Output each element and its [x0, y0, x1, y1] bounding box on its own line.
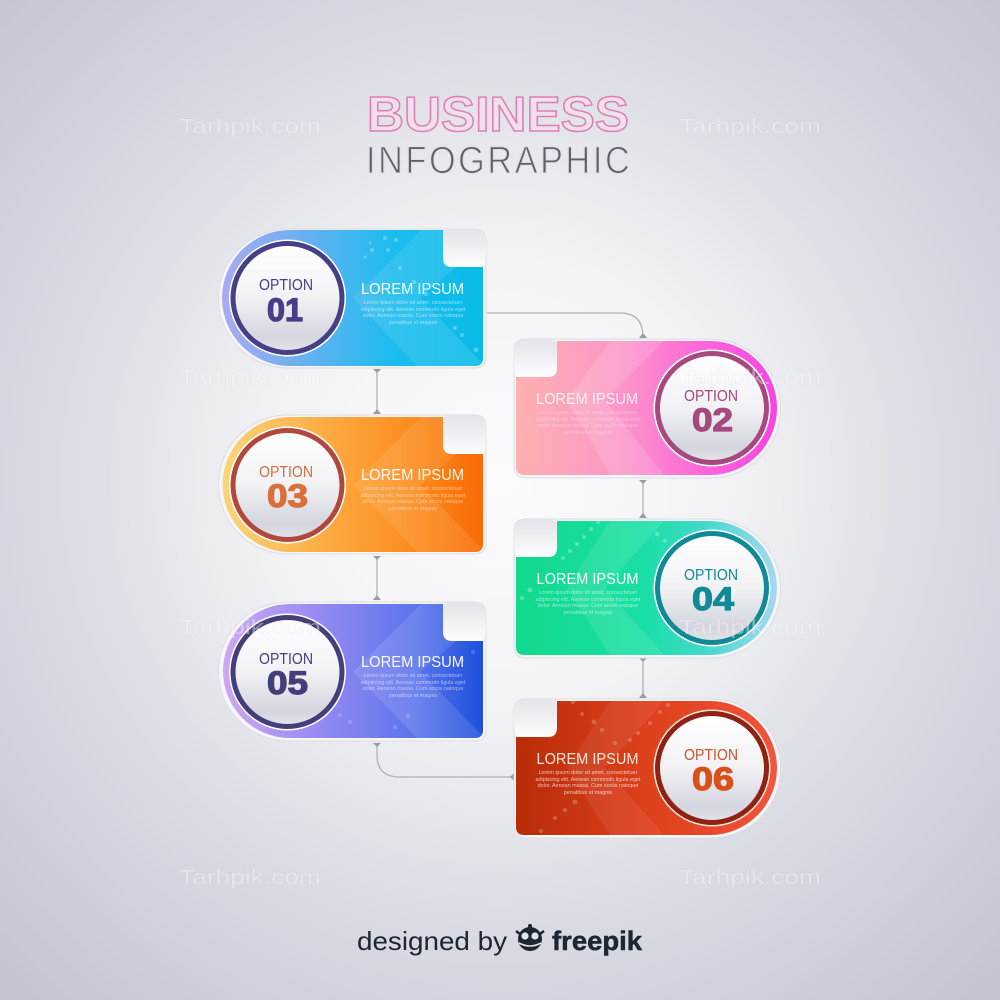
- text block: penatibus et magnis: [564, 430, 612, 436]
- badge: OPTION: [684, 388, 738, 405]
- panel: option 05: [219, 602, 500, 741]
- badge: OPTION: [259, 464, 313, 481]
- badge: OPTION: [259, 651, 313, 668]
- panel: option 03: [219, 415, 500, 554]
- title line: infographic: INFOGRAPHIC: [366, 138, 630, 181]
- badge: 06: [692, 761, 734, 797]
- footer credit: [357, 924, 643, 956]
- badge: OPTION: [259, 277, 313, 294]
- text block: dolor. Aenean massa. Cum sociis natoque: [363, 686, 463, 692]
- text block: [536, 391, 641, 436]
- watermarks: Tarhpik.com: [679, 116, 821, 138]
- text block: dolor. Aenean massa. Cum sociis natoque: [538, 423, 638, 429]
- watermarks: [179, 116, 821, 889]
- badge: [654, 350, 770, 466]
- badge: [654, 530, 770, 646]
- watermarks: Tarhpik.com: [179, 617, 321, 639]
- text block: adipiscing elit. Aenean commodo ligula eget: [361, 307, 466, 313]
- watermarks: Tarhpik.com: [179, 867, 321, 889]
- text block: Lorem ipsum dolor sit amet, consectetuer: [539, 410, 638, 416]
- text block: [536, 751, 641, 796]
- text block: LOREM IPSUM: [536, 571, 638, 588]
- text block: adipiscing elit. Aenean commodo ligula eget: [361, 680, 466, 686]
- panel: option 01: [219, 229, 500, 368]
- footer credit: freepik: [552, 926, 643, 956]
- text block: [536, 571, 641, 616]
- panel: option 02: [514, 339, 780, 478]
- badge: [229, 426, 346, 544]
- text block: adipiscing elit. Aenean commodo ligula eget: [536, 777, 641, 783]
- text block: adipiscing elit. Aenean commodo ligula eget: [536, 597, 641, 603]
- text block: Lorem ipsum dolor sit amet, consectetuer: [364, 673, 463, 679]
- text block: adipiscing elit. Aenean commodo ligula eget: [536, 417, 641, 423]
- text block: adipiscing elit. Aenean commodo ligula eget: [361, 493, 466, 499]
- text block: Lorem ipsum dolor sit amet, consectetuer: [539, 590, 638, 596]
- text block: penatibus et magnis: [389, 320, 437, 326]
- text block: Lorem ipsum dolor sit amet, consectetuer: [364, 486, 463, 492]
- text block: penatibus et magnis: [564, 610, 612, 616]
- badge: [654, 710, 770, 826]
- connectors: [373, 313, 647, 781]
- text block: [361, 654, 466, 699]
- text block: dolor. Aenean massa. Cum sociis natoque: [538, 603, 638, 609]
- footer credit: designed by: [357, 926, 507, 956]
- text block: LOREM IPSUM: [361, 281, 464, 298]
- badge: [229, 614, 346, 730]
- text block: penatibus et magnis: [564, 790, 612, 796]
- text block: Lorem ipsum dolor sit amet, consectetuer: [364, 300, 463, 306]
- text block: LOREM IPSUM: [536, 391, 638, 408]
- text block: LOREM IPSUM: [536, 751, 638, 768]
- text block: [361, 467, 466, 512]
- text block: penatibus et magnis: [389, 693, 437, 699]
- badge: 02: [692, 402, 733, 438]
- watermarks: Tarhpik.com: [679, 367, 821, 389]
- icon: freepik mascot: [516, 924, 544, 951]
- badge: [229, 240, 346, 356]
- badge: 03: [267, 478, 308, 514]
- text block: dolor. Aenean massa. Cum sociis natoque: [538, 783, 638, 789]
- title line: business: BUSINESS: [367, 88, 629, 142]
- watermarks: Tarhpik.com: [679, 617, 821, 639]
- panel: option 06: [514, 699, 780, 838]
- text block: LOREM IPSUM: [361, 467, 464, 484]
- title: [366, 88, 630, 181]
- text block: [361, 281, 466, 326]
- watermarks: Tarhpik.com: [679, 867, 821, 889]
- text block: dolor. Aenean massa. Cum sociis natoque: [363, 499, 463, 505]
- watermarks: Tarhpik.com: [179, 116, 321, 138]
- watermarks: Tarhpik.com: [179, 367, 321, 389]
- text block: LOREM IPSUM: [361, 654, 464, 671]
- badge: OPTION: [684, 747, 738, 764]
- badge: 04: [692, 581, 734, 617]
- text block: Lorem ipsum dolor sit amet, consectetuer: [539, 770, 638, 776]
- badge: 05: [267, 665, 308, 701]
- text block: penatibus et magnis: [389, 506, 437, 512]
- badge: OPTION: [684, 567, 738, 584]
- panel: option 04: [514, 519, 780, 658]
- text block: dolor. Aenean massa. Cum sociis natoque: [363, 313, 463, 319]
- badge: 01: [267, 292, 303, 328]
